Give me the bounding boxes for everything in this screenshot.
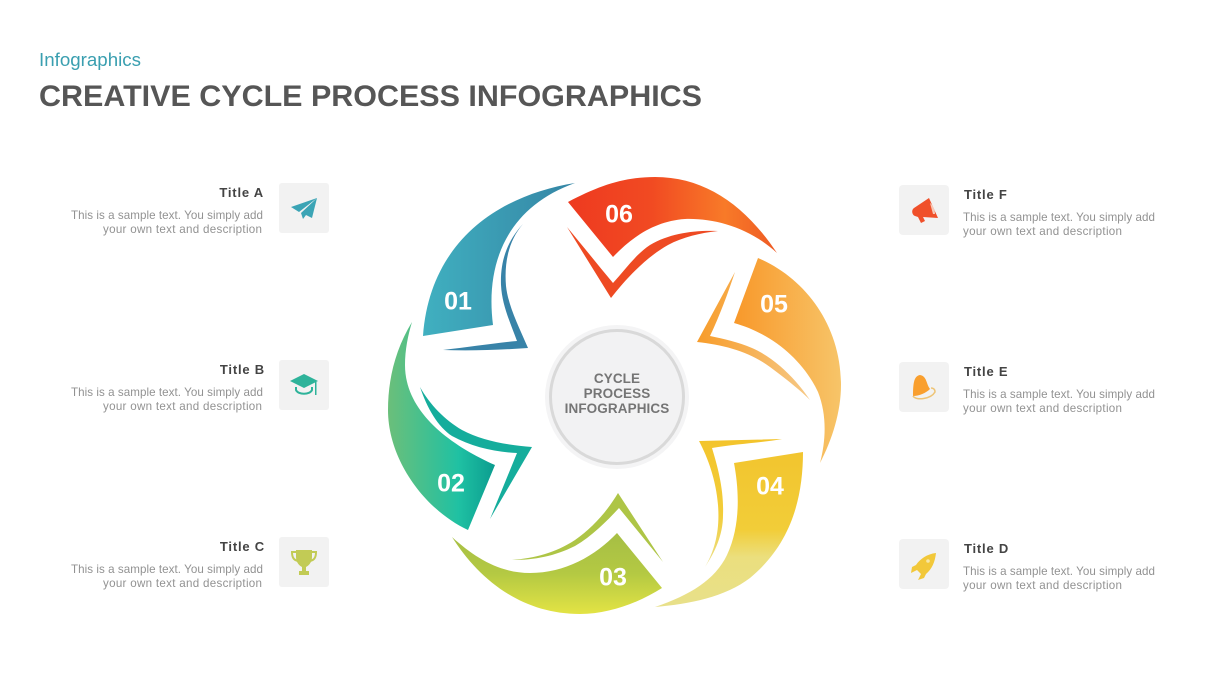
item: Title C: Title C xyxy=(220,539,265,554)
subtitle: Infographics xyxy=(39,49,141,70)
item: Title C: This is a sample text. You simply add xyxy=(71,563,263,576)
item: Title E: This is a sample text. You simply add xyxy=(963,388,1155,401)
item: Title A: This is a sample text. You simply add xyxy=(71,209,263,222)
number 01: 01 xyxy=(444,288,472,316)
number 03: 03 xyxy=(599,564,627,592)
item: Title C xyxy=(71,537,329,590)
item: Title E xyxy=(899,362,1155,415)
center circle xyxy=(545,325,689,469)
item: Title B: Title B xyxy=(220,362,265,377)
icon: bell xyxy=(899,362,949,412)
center label: CYCLE xyxy=(594,371,640,386)
icon: trophy xyxy=(279,537,329,587)
item: Title A xyxy=(71,183,329,236)
number 06: 06 xyxy=(605,200,633,228)
segment 04 xyxy=(655,439,803,607)
number 05: 05 xyxy=(760,290,788,318)
icon: paper plane xyxy=(279,183,329,233)
number 02: 02 xyxy=(437,470,465,498)
item: Title A: Title A xyxy=(219,185,264,200)
center label: INFOGRAPHICS xyxy=(565,401,669,416)
title: CREATIVE CYCLE PROCESS INFOGRAPHICS xyxy=(39,80,702,113)
segment 02 xyxy=(388,322,532,530)
item: Title E: Title E xyxy=(964,364,1008,379)
item: Title E: your own text and description xyxy=(963,402,1122,415)
item: Title F xyxy=(899,185,1155,238)
number 04: 04 xyxy=(756,472,784,500)
item: Title C: your own text and description xyxy=(103,577,262,590)
item: Title F: Title F xyxy=(964,187,1008,202)
item: Title B: This is a sample text. You simply add xyxy=(71,386,263,399)
segment 01 xyxy=(423,183,575,350)
item: Title D: This is a sample text. You simply add xyxy=(963,565,1155,578)
cycle diagram xyxy=(388,177,841,614)
item: Title D: your own text and description xyxy=(963,579,1122,592)
item: Title F: This is a sample text. You simply add xyxy=(963,211,1155,224)
icon: graduation cap xyxy=(279,360,329,410)
segment 03 xyxy=(452,493,663,614)
item: Title A: your own text and description xyxy=(103,223,262,236)
center label: PROCESS xyxy=(584,386,650,401)
item: Title B xyxy=(71,360,329,413)
item: Title B: your own text and description xyxy=(103,400,262,413)
icon: rocket xyxy=(899,539,949,589)
segment 05 xyxy=(697,258,841,463)
item: Title D xyxy=(899,539,1155,592)
segment 06 xyxy=(567,177,777,298)
item: Title D: Title D xyxy=(964,541,1009,556)
icon: megaphone xyxy=(899,185,949,235)
item: Title F: your own text and description xyxy=(963,225,1122,238)
